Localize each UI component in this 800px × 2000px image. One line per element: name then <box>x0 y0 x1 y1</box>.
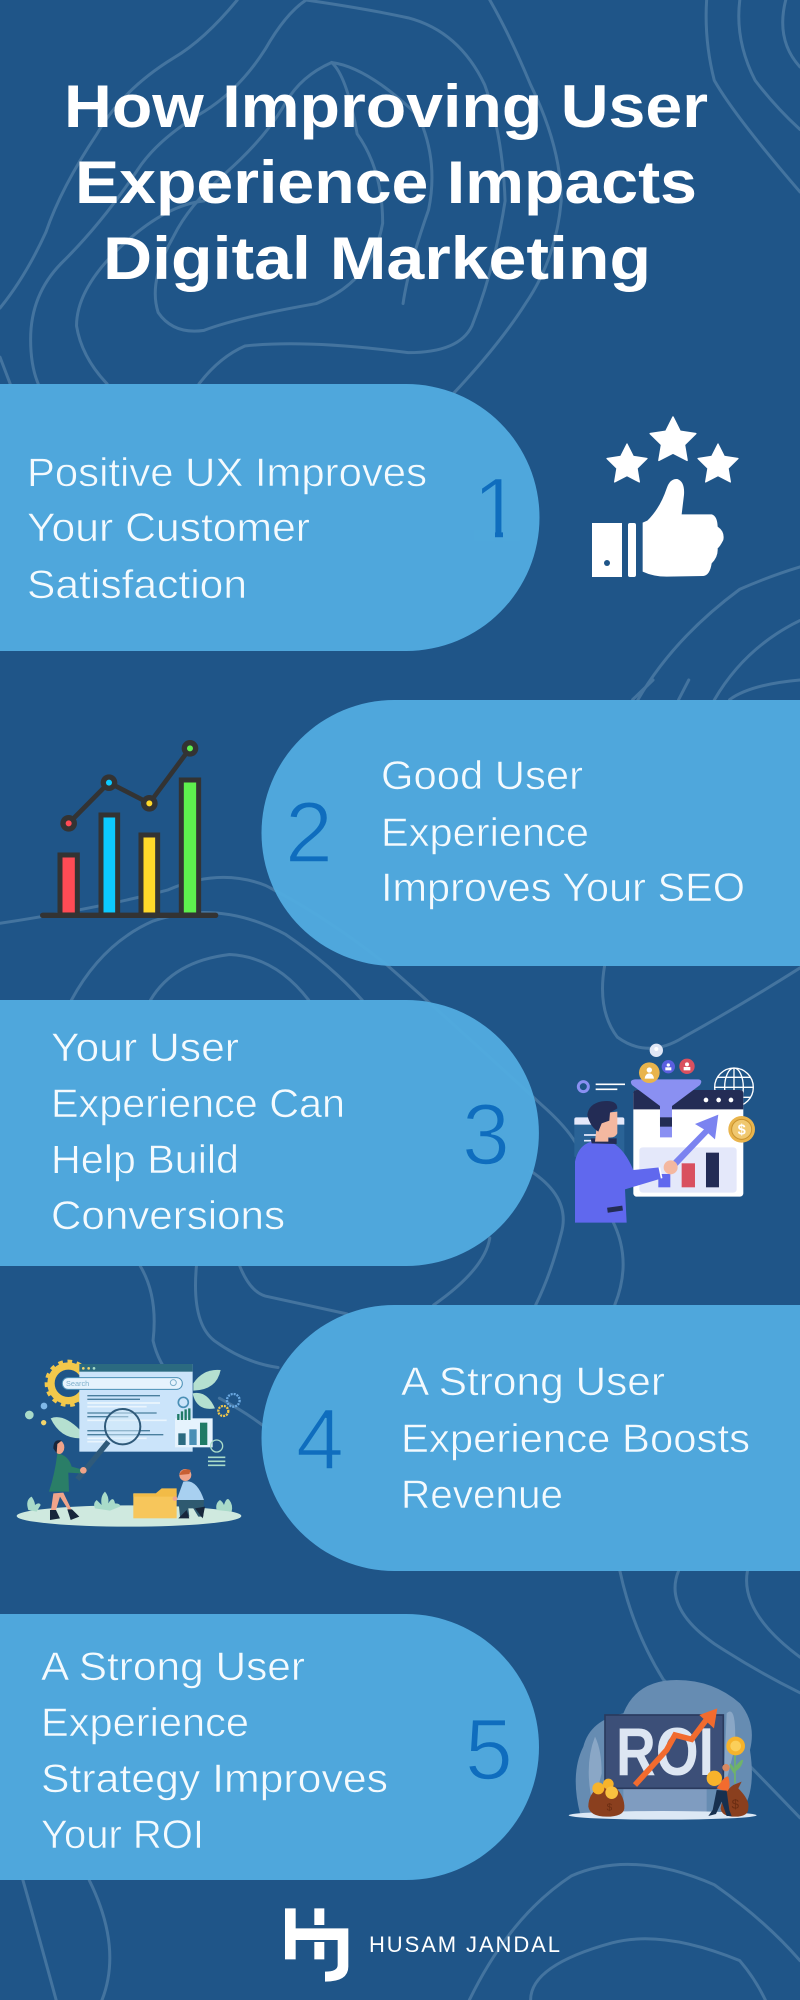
icon: ROI monitor with money bags <box>569 1680 757 1820</box>
step 3 text: Conversions <box>51 1194 285 1238</box>
step 2 text: Good User <box>381 754 583 798</box>
step 4 text: A Strong User <box>401 1360 665 1404</box>
icon: ROI monitor with money bags: $ <box>732 1796 740 1811</box>
icon: ROI monitor with money bags: $ <box>607 1803 613 1814</box>
step 1 text: Satisfaction <box>27 563 247 607</box>
step 1 number: 1 <box>473 461 521 557</box>
step 2 text: Experience <box>381 811 589 855</box>
icon: website search with figures: Search <box>66 1379 89 1388</box>
step 5 number: 5 <box>465 1702 513 1798</box>
step 2 number: 2 <box>285 785 333 881</box>
step 4 text <box>401 1360 750 1517</box>
step 3 number: 3 <box>462 1087 510 1183</box>
icon: conversion funnel with presenter: $ <box>738 1123 746 1139</box>
logo mark: HJ monogram <box>285 1908 348 1982</box>
step 1 text: Your Customer <box>27 506 310 550</box>
step 3 text: Help Build <box>51 1138 239 1182</box>
icon: ROI monitor with money bags: ROI <box>616 1714 714 1790</box>
step 1 text: Positive UX Improves <box>27 451 427 495</box>
step 5 text: Your ROI <box>41 1813 204 1857</box>
step 3 text: Your User <box>51 1026 239 1070</box>
panel: step 4 <box>262 1305 800 1571</box>
step 5 text: Strategy Improves <box>41 1757 388 1801</box>
step 5 text: A Strong User <box>41 1645 305 1689</box>
icon: website search with figures <box>17 1361 241 1527</box>
title: How Improving User <box>64 73 708 140</box>
step 1 text <box>27 451 427 607</box>
step 3 text: Experience Can <box>51 1082 345 1126</box>
step 5 text: Experience <box>41 1701 249 1745</box>
step 2 text: Improves Your SEO <box>381 866 745 910</box>
step 2 text <box>381 754 745 910</box>
step 5 text <box>41 1645 388 1857</box>
step 4 text: Experience Boosts <box>401 1417 750 1461</box>
icon: bar and line chart <box>40 740 218 918</box>
step 3 text <box>51 1026 345 1238</box>
icon: thumbs up with stars <box>592 417 738 577</box>
panel: step 2 <box>262 700 800 966</box>
icon: conversion funnel with presenter <box>574 1044 755 1223</box>
step 4 number: 4 <box>296 1392 344 1488</box>
title: Experience Impacts <box>75 149 697 216</box>
step 4 text: Revenue <box>401 1473 563 1517</box>
logo <box>285 1908 560 1982</box>
title <box>64 73 708 292</box>
title: Digital Marketing <box>103 225 651 292</box>
panel: step 1 <box>0 384 540 651</box>
panel: step 3 <box>0 1000 539 1266</box>
panel: step 5 <box>0 1614 539 1880</box>
logo wordmark: HUSAM JANDAL <box>369 1932 560 1957</box>
